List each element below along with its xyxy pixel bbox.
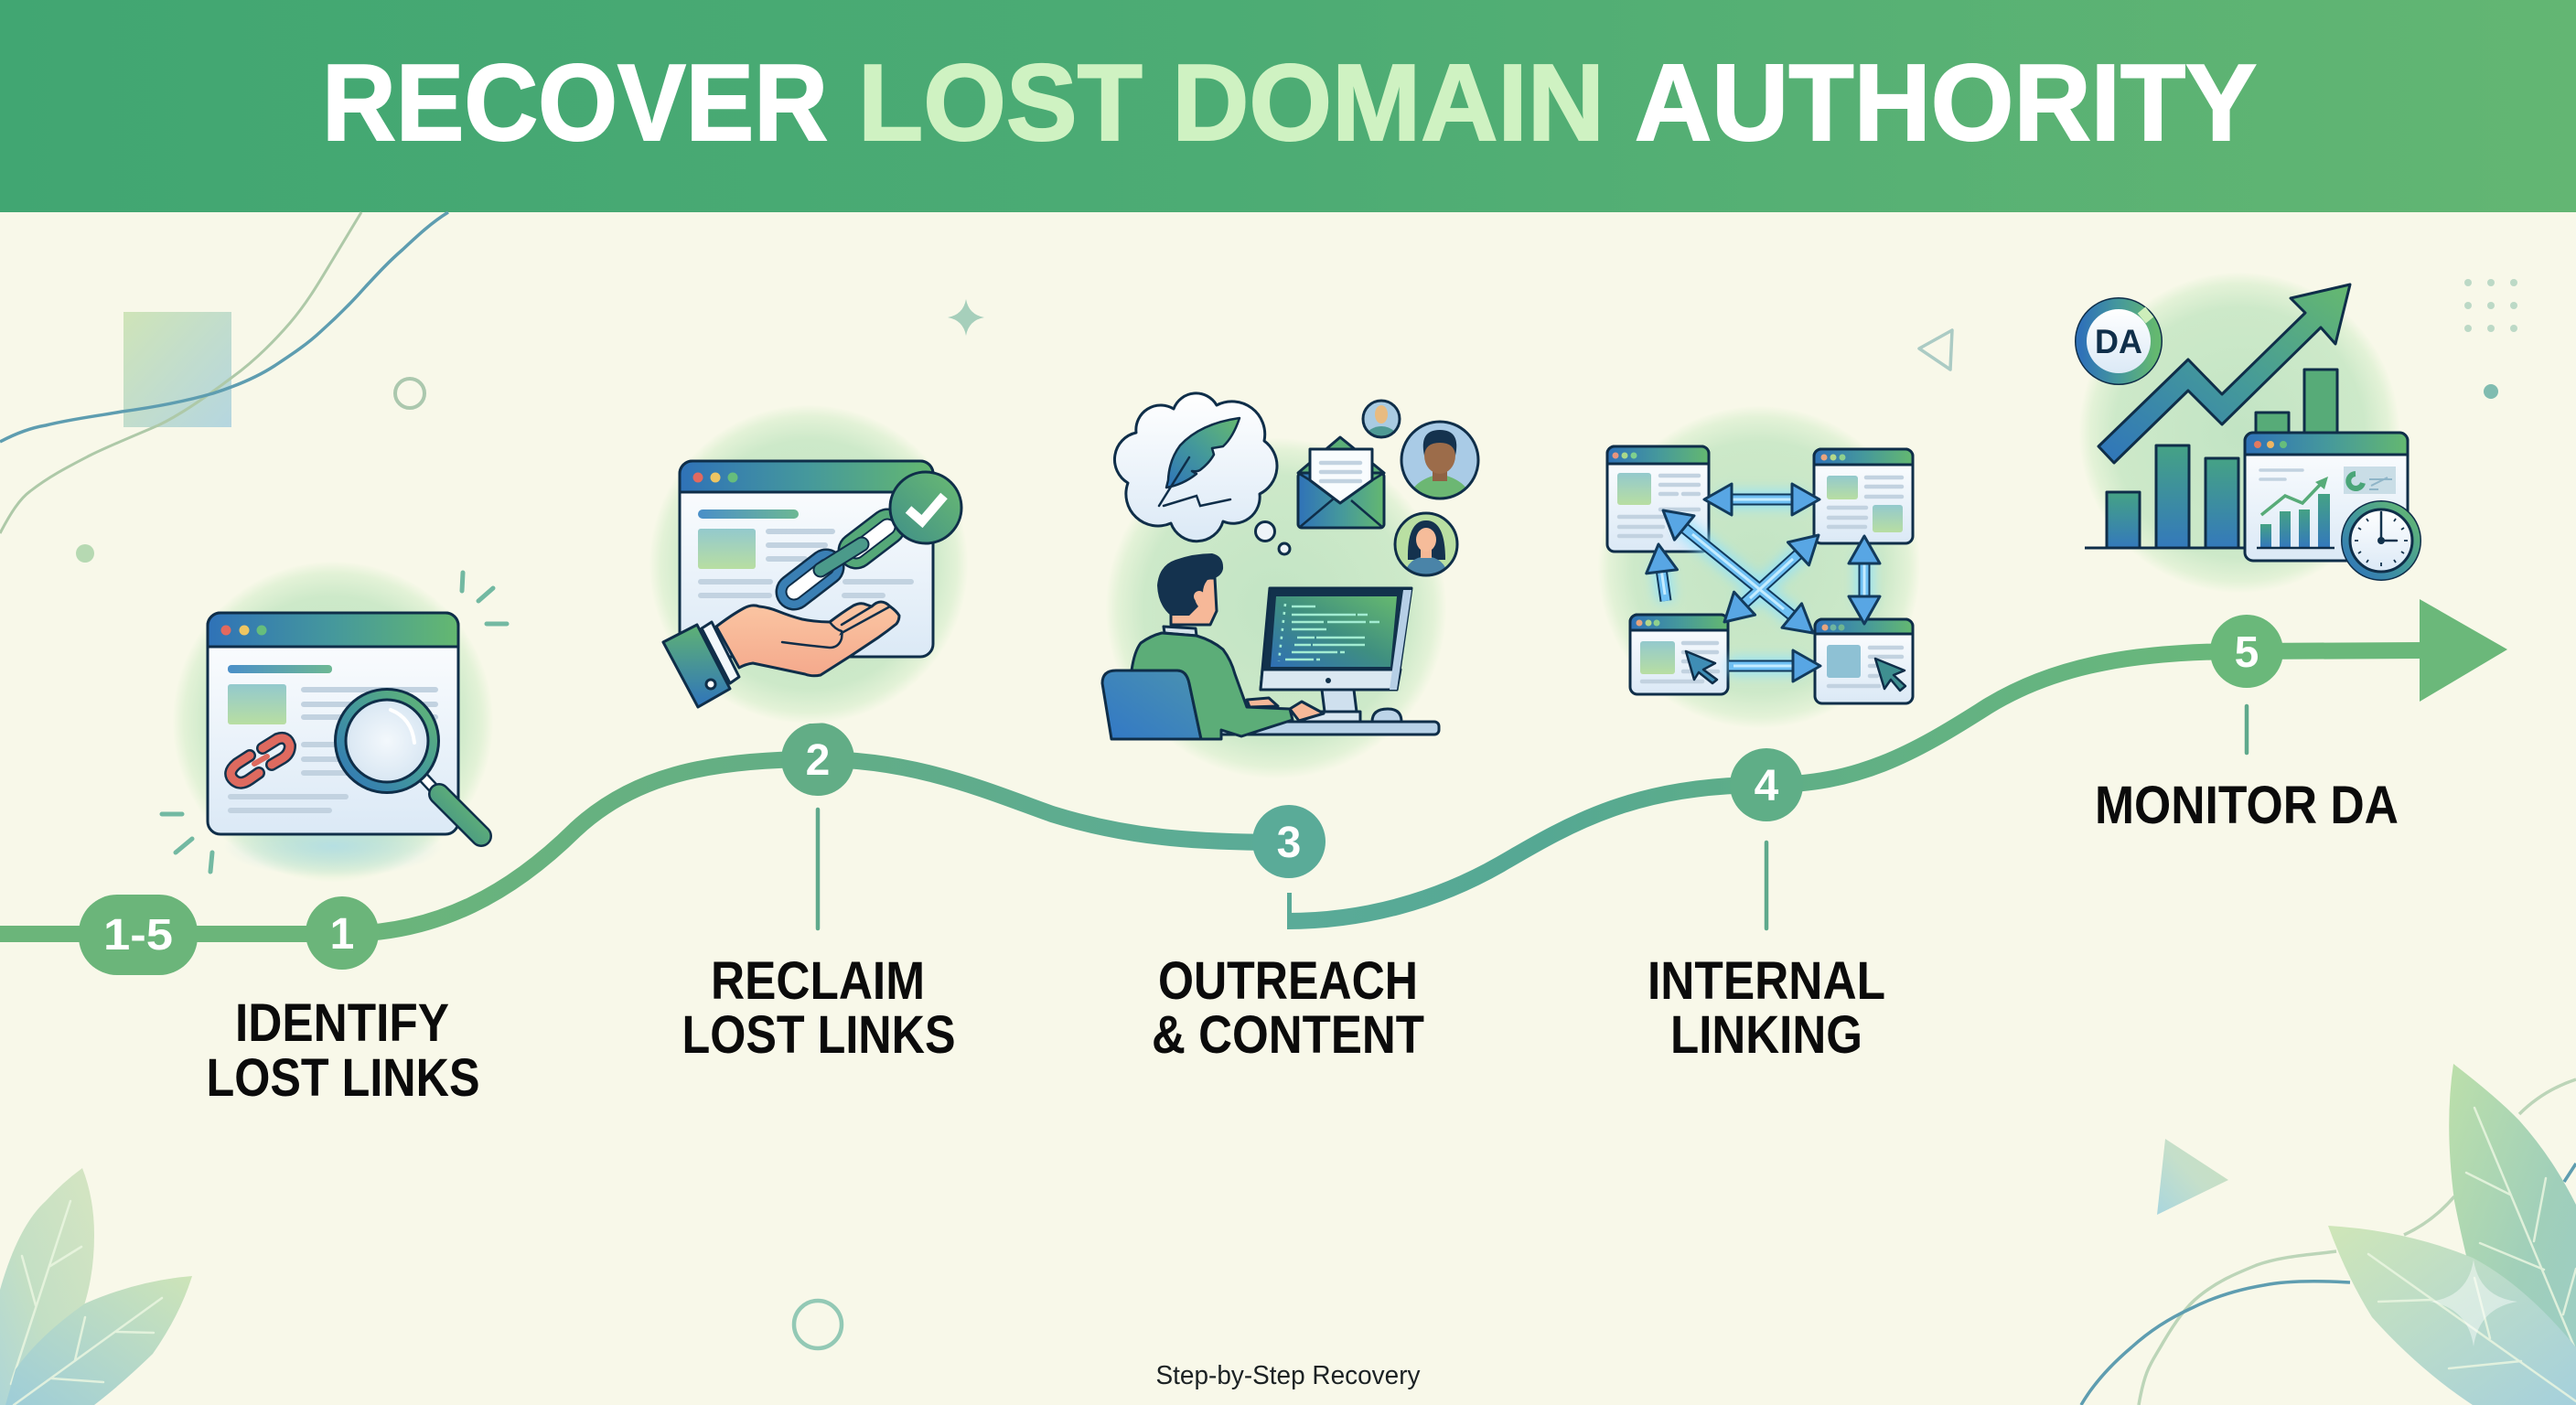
envelope [1298,437,1384,528]
check badge [890,472,961,543]
icon: internal linking [1598,406,1920,728]
page B [1814,449,1913,543]
title: LOST DOMAIN [858,42,1605,164]
leaves bottom left [0,1168,192,1405]
footer caption: Step-by-Step Recovery [1156,1361,1421,1390]
badge: step 3: 3 [1277,819,1301,867]
bar chart [2085,370,2337,548]
thought cloud with feather [1114,393,1290,554]
label: internal linking: INTERNAL [1648,951,1885,1011]
label: internal linking: LINKING [1670,1005,1862,1065]
chain links [794,527,887,592]
label: reclaim lost links: LOST LINKS [682,1005,955,1065]
broken link [231,738,290,783]
avatar: man [1401,422,1478,499]
page C [1630,615,1728,694]
icon: identify lost links [162,562,507,882]
person at desk [1102,553,1439,739]
badge: step 2: 2 [806,736,830,785]
growth arrow [2098,284,2350,463]
title [322,42,2257,164]
icon: monitor da [2075,273,2421,593]
label: outreach and content: OUTREACH [1158,951,1418,1011]
leaves and curves bottom right [2081,1064,2576,1405]
avatar: small [1363,401,1400,437]
badge: step 1 [306,896,379,970]
badge: 1-5: 1-5 [103,911,173,960]
header banner [0,0,2576,212]
icon: reclaim lost links [649,405,968,724]
badge: step 3 [1252,805,1326,878]
hand [663,602,899,707]
magnifying glass [334,688,481,836]
title: RECOVER [322,42,828,164]
page A [1607,446,1709,552]
page D [1815,619,1913,703]
decorative background shapes top [0,212,2517,1348]
badge: step 1: 1 [330,910,354,959]
label: monitor da: MONITOR DA [2095,776,2399,835]
progress path [0,599,2507,934]
label: identify lost links: LOST LINKS [207,1048,479,1108]
avatar: woman [1395,513,1457,576]
link arrows [1658,499,1864,666]
badge: step 5: 5 [2235,628,2259,677]
badge: step 4 [1730,748,1803,821]
dashboard window [2245,433,2408,561]
badge: step 4: 4 [1755,762,1779,810]
label: reclaim lost links: RECLAIM [711,951,925,1011]
DA badge: DA [2095,323,2142,360]
clock [2341,500,2421,581]
label: outreach and content: & CONTENT [1152,1005,1424,1065]
title: AUTHORITY [1635,42,2257,164]
badge: step 5 [2210,615,2283,688]
DA badge [2075,297,2163,385]
arrow head [2420,599,2507,702]
badge: 1-5 [79,895,198,975]
badge: step 2 [781,723,854,796]
icon: outreach and content [1102,393,1478,778]
label: identify lost links: IDENTIFY [235,993,449,1053]
